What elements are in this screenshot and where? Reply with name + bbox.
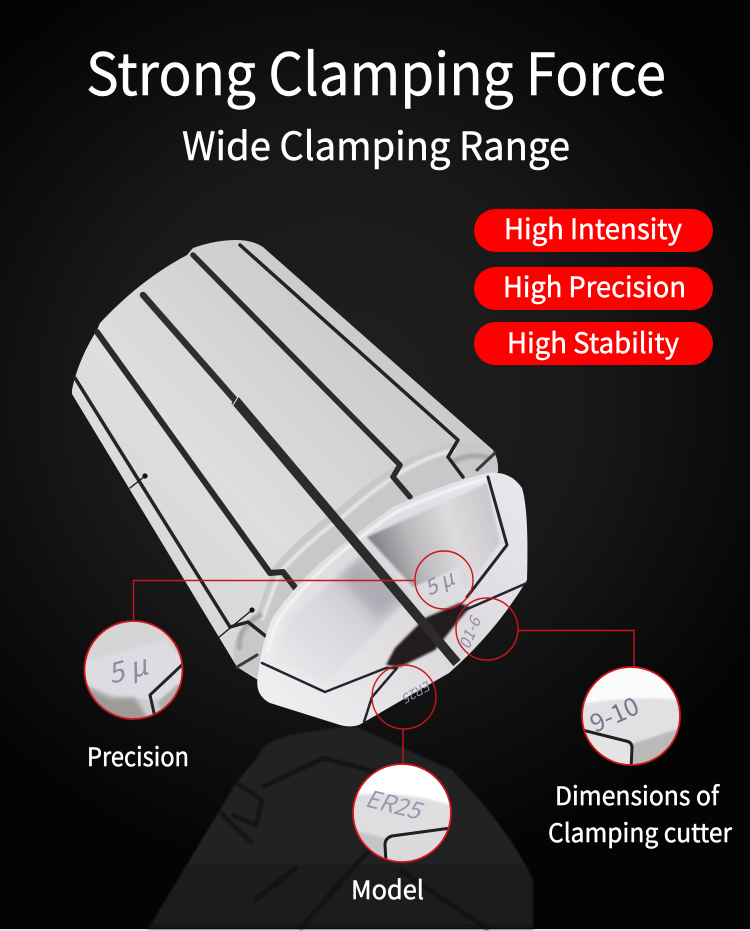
label: precision: Precision — [87, 737, 189, 774]
label: model: Model — [351, 870, 424, 907]
detail circle: 5 micron — [84, 618, 183, 722]
badge: high intensity: High Intensity — [504, 208, 682, 248]
callout: model — [351, 665, 451, 907]
upper right facet — [367, 483, 500, 590]
label: dimensions — [548, 776, 732, 850]
central slot — [235, 400, 457, 663]
engraved marks — [398, 562, 486, 709]
chamfer ring — [233, 442, 498, 677]
detail circle: ER25: ER25 — [362, 779, 428, 827]
collet illustration — [72, 240, 527, 726]
label: dimensions: Dimensions of — [555, 776, 721, 813]
callout: precision — [84, 551, 473, 774]
callout: dimensions — [456, 598, 732, 850]
collet barrel — [72, 240, 498, 680]
slots on barrel — [75, 245, 495, 667]
detail circle: ER25 — [353, 764, 451, 862]
engraved marks: 5 μ — [419, 562, 459, 602]
badge: high intensity — [474, 208, 713, 252]
badge: high stability — [474, 322, 713, 365]
subtitle: Wide Clamping Range — [182, 116, 570, 172]
collet nose cone — [257, 473, 527, 726]
screw dots — [142, 473, 148, 479]
badge: high stability: High Stability — [507, 322, 679, 362]
bore hole — [386, 603, 470, 667]
title: Strong Clamping Force — [86, 28, 666, 112]
reflection of collet — [148, 727, 533, 929]
label: dimensions: Clamping cutter — [548, 813, 732, 850]
nose cone grooves — [262, 477, 527, 722]
detail circle: 9-10 — [582, 667, 680, 770]
detail circle: 5 micron: 5 μ — [103, 643, 153, 693]
detail circle: 9-10: 9-10 — [584, 687, 644, 740]
engraved marks: ER25 — [398, 677, 436, 709]
badge: high precision: High Precision — [503, 266, 686, 306]
lower left facet — [275, 552, 410, 682]
engraved marks: 01-6 — [451, 611, 486, 652]
